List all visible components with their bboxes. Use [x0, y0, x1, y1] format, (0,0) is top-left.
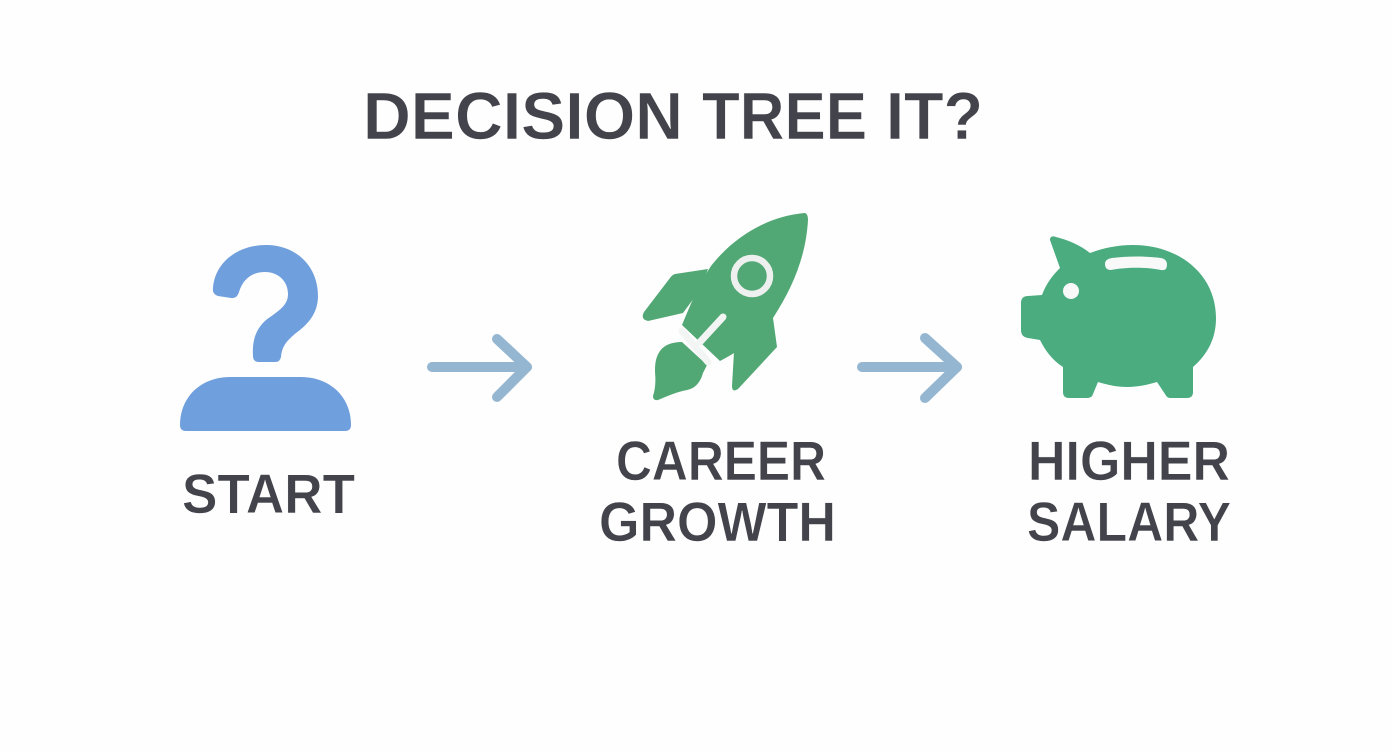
label: higher salary: HIGHER	[1028, 429, 1230, 492]
label: career growth	[599, 429, 836, 553]
step: start	[180, 245, 355, 525]
arrow: career growth to higher salary	[862, 338, 957, 398]
title: IT?	[886, 79, 983, 154]
label: start: START	[182, 462, 355, 525]
icon: rocket	[643, 213, 808, 400]
rocket window	[734, 258, 770, 294]
title: TREE	[702, 79, 867, 154]
piggy bank eye	[1063, 283, 1079, 299]
arrow: start to career growth	[432, 339, 527, 397]
step: higher salary	[1021, 236, 1231, 553]
rocket stem	[682, 317, 723, 362]
title	[363, 79, 983, 154]
icon: piggy bank	[1021, 236, 1216, 398]
title: DECISION	[363, 79, 683, 154]
step: career growth	[599, 213, 836, 553]
label: higher salary	[1027, 429, 1231, 553]
label: career growth: GROWTH	[599, 490, 836, 553]
label: career growth: CAREER	[616, 429, 826, 492]
label: higher salary: SALARY	[1027, 490, 1231, 553]
icon: question mark over base	[180, 245, 351, 431]
piggy bank coin slot	[1105, 256, 1167, 270]
